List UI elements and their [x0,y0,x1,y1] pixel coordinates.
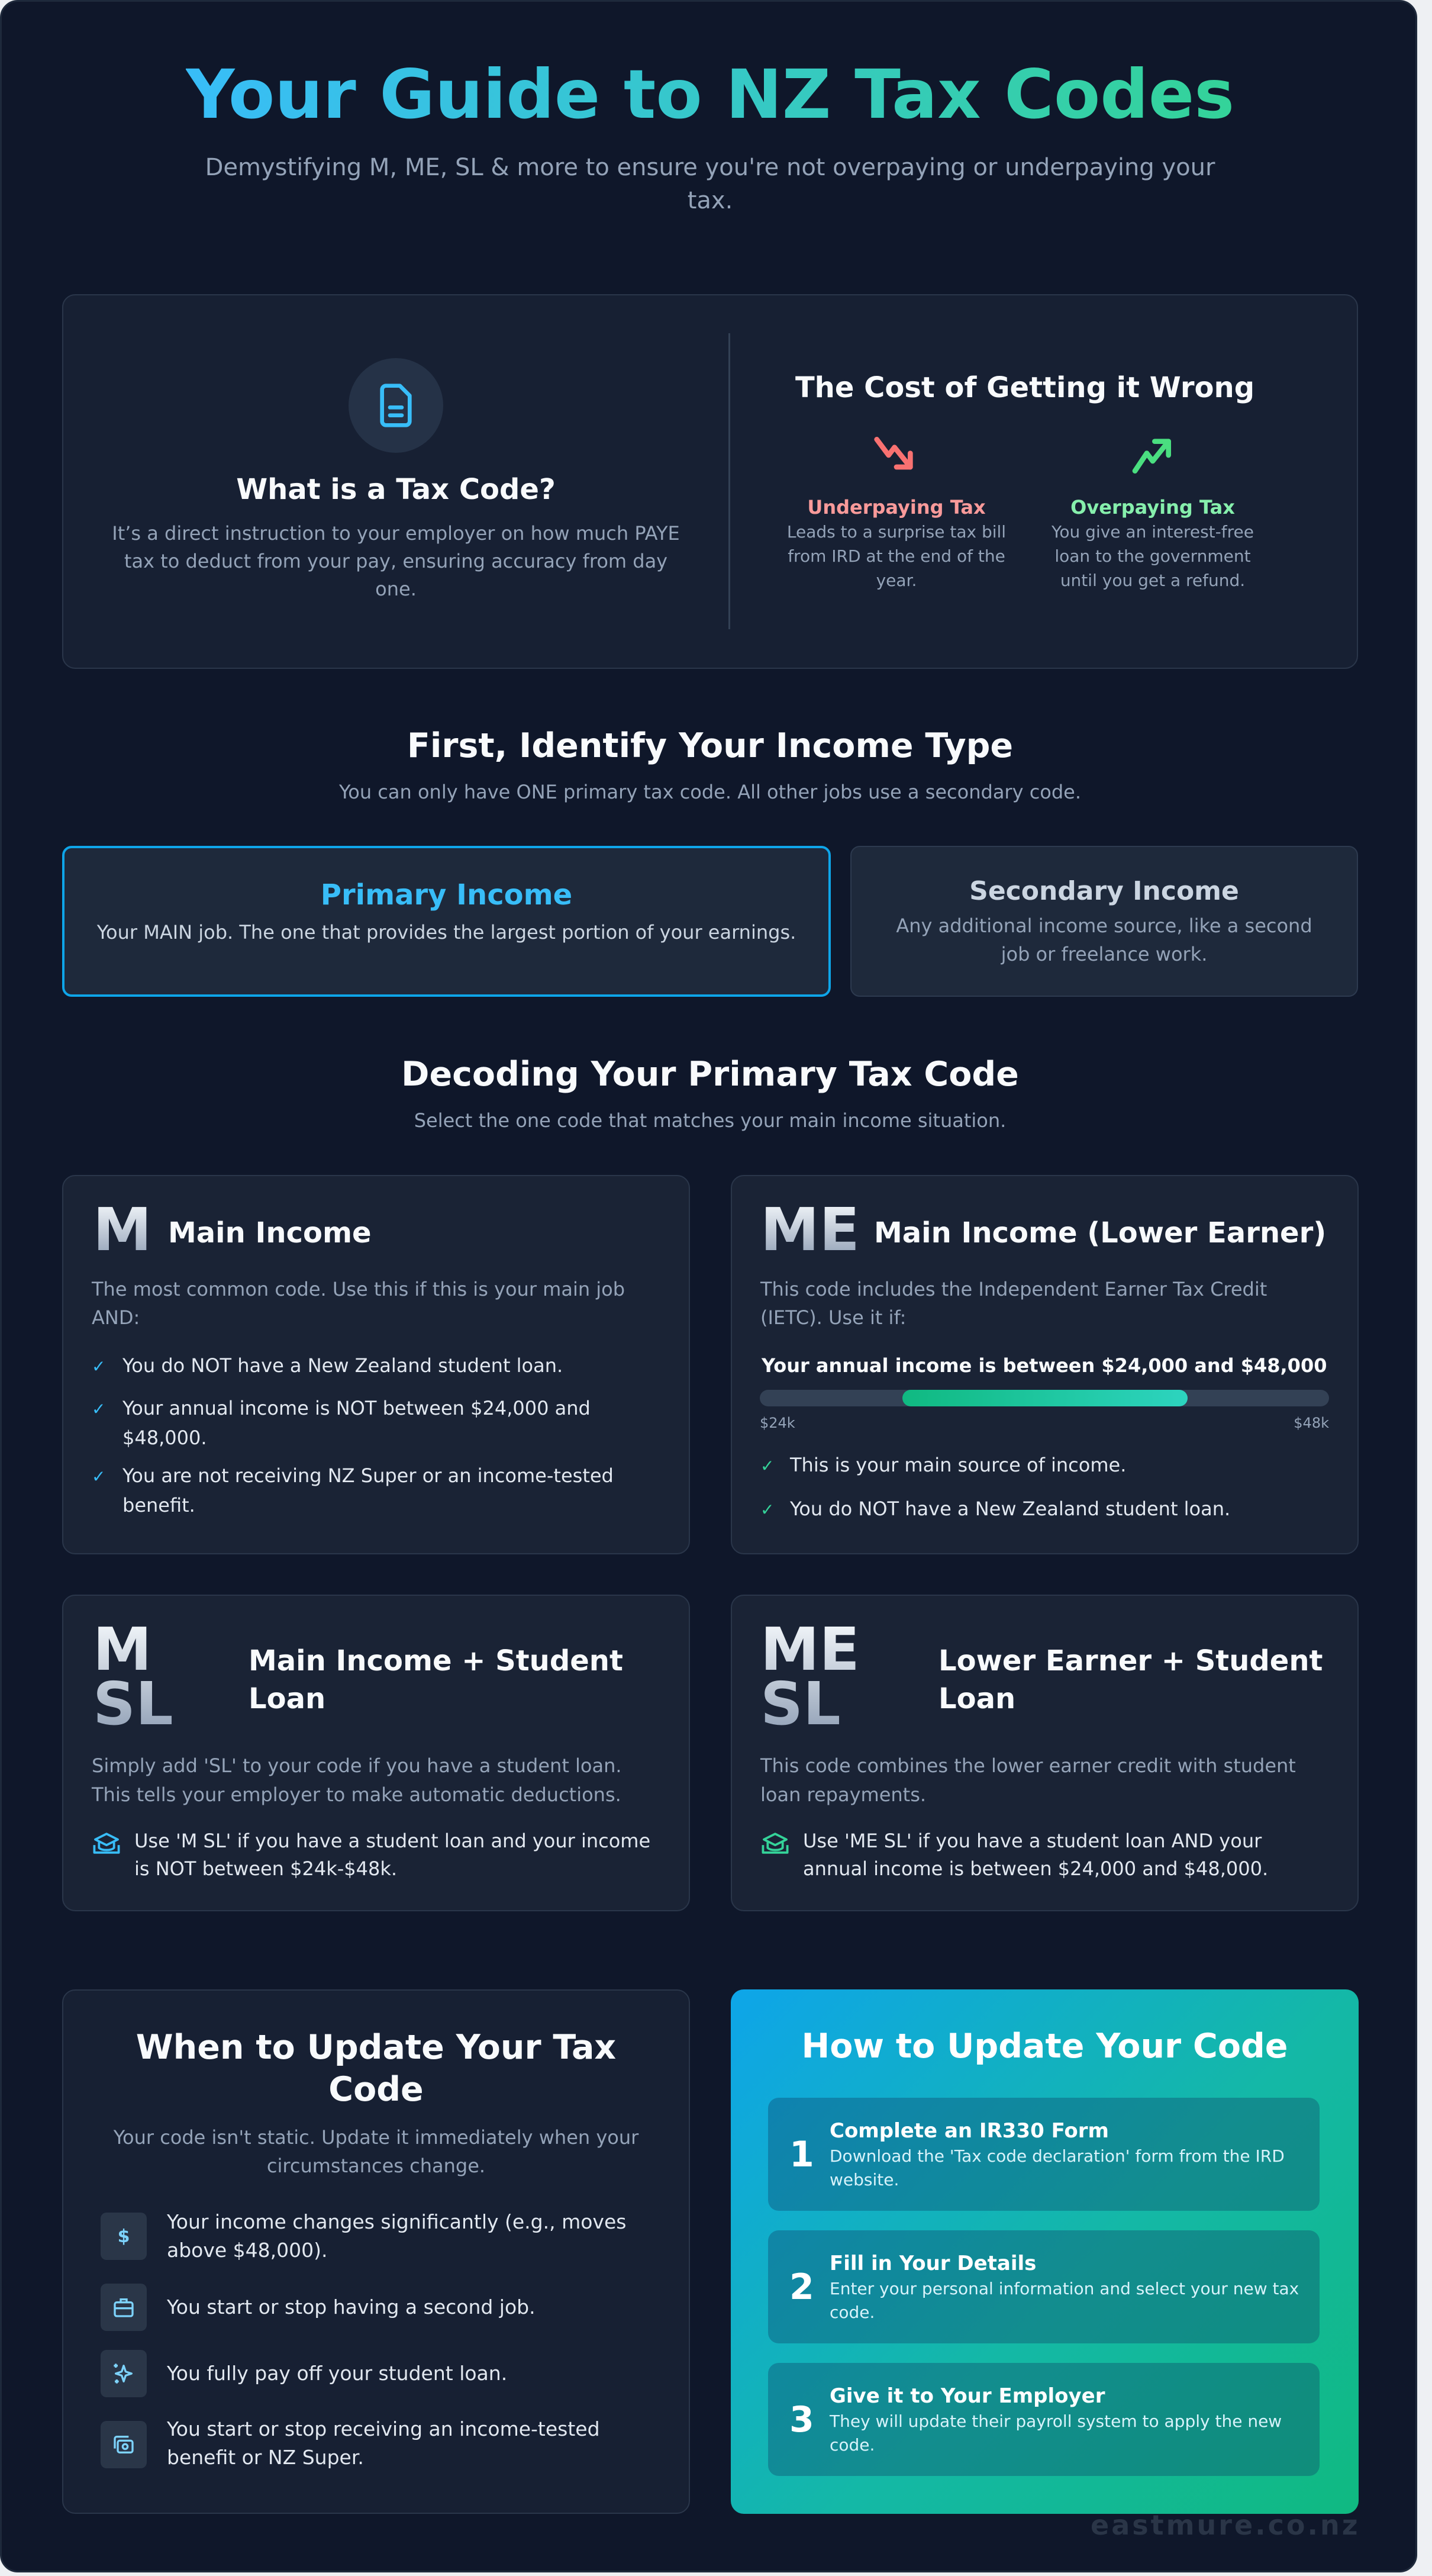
checklist: You do NOT have a New Zealand student loan. [790,1498,1230,1520]
panel: when to update [62,1989,690,2514]
heading: secondary: Secondary Income [969,876,1239,906]
checklist: You are not receiving NZ Super or an income-tested [122,1464,614,1487]
text: overpaying [1052,496,1254,590]
item: income change: above $48,000). [167,2239,328,2262]
step 3: 3 [789,2399,814,2440]
text: underpaying: from IRD at the end of the [788,546,1005,566]
note with icon [93,1830,650,1880]
step 2: Fill in Your Details [830,2252,1036,2275]
item: benefit: You start or stop receiving an income-tested [167,2417,600,2440]
text: overpaying: until you get a refund. [1060,571,1245,590]
code letters ME SL [760,1622,860,1731]
checklist: Your annual income is NOT between $24,000 and [122,1397,591,1419]
step 3: They will update their payroll system to apply the new [830,2411,1282,2431]
item: benefit [101,2417,600,2469]
code letters ME SL: ME [760,1615,860,1684]
note with icon [762,1830,1268,1880]
text: overpaying: Overpaying Tax [1070,496,1235,519]
subtext: Your code isn't static. Update it immediately when your [114,2126,638,2149]
icon: trending up [1133,439,1171,474]
icon: dollar: $ [118,2226,130,2247]
text: underpaying: Leads to a surprise tax bill [787,522,1006,542]
text: tax code description: It’s a direct instruction to your employer on how much PAYE [112,522,680,545]
subtitle: Demystifying M, ME, SL & more to ensure you're not overpaying or underpaying your [205,154,1215,181]
subtitle: tax. [688,187,733,214]
step 1: website. [830,2170,899,2189]
card: M SL [62,1595,690,1911]
title [249,1644,623,1715]
panel: secondary income [850,846,1358,997]
desc: This code includes the Independent Earner Tax Credit [760,1278,1267,1300]
title: Main Income + Student [249,1644,623,1677]
checklist: $48,000. [122,1427,207,1449]
note with icon: Use 'M SL' if you have a student loan and your income [134,1830,650,1852]
item: second job [101,2284,536,2331]
title [938,1644,1323,1715]
step 1: Complete an IR330 Form [830,2119,1109,2143]
bar labels: $48k [1294,1415,1329,1431]
desc: The most common code. Use this if this is your main job [92,1278,625,1300]
desc: Simply add 'SL' to your code if you have a student loan. [92,1754,622,1777]
checklist: You do NOT have a New Zealand student loan. [122,1354,563,1377]
title: Main Income (Lower Earner) [874,1216,1326,1250]
checklist: ✓ [92,1399,105,1419]
text: overpaying: You give an interest-free [1052,522,1254,542]
text: secondary desc: Any additional income source, like a second [896,915,1312,937]
step 3: Give it to Your Employer [830,2384,1105,2408]
step 1: Download the 'Tax code declaration' form from the IRD [830,2146,1285,2166]
bar labels [760,1415,1329,1431]
note with icon: is NOT between $24k-$48k. [134,1857,397,1880]
desc: This code combines the lower earner credit with student [760,1754,1296,1777]
heading: identify income type: First, Identify Your Income Type [407,726,1013,765]
icon: dollar [101,2213,147,2260]
step 1 [768,2098,1320,2211]
panel: how to update [731,1989,1359,2514]
icon: sparkle [101,2350,147,2397]
card: ME [731,1175,1359,1554]
step 2: 2 [789,2266,814,2308]
checklist: ✓ [92,1467,105,1486]
item: income change: Your income changes significantly (e.g., moves [167,2210,626,2233]
text: secondary desc [896,915,1312,965]
text: underpaying: year. [876,571,917,590]
range bar [760,1390,1329,1406]
code letter M: M [93,1195,152,1264]
code letters M SL: M [93,1615,152,1684]
note with icon: Use 'ME SL' if you have a student loan AND your [803,1830,1262,1852]
step 2 [768,2230,1320,2343]
checklist: ✓ [92,1357,105,1376]
text: tax code description: one. [375,578,417,600]
icon: cash [101,2421,147,2468]
heading [136,2028,616,2109]
item: income change [101,2210,626,2262]
icon: document [349,358,443,453]
subtext: circumstances change. [267,2155,485,2177]
title: Loan [249,1682,325,1715]
item: student loan paid [101,2350,507,2397]
icon: briefcase [101,2284,147,2331]
step 3: code. [830,2435,875,2455]
heading: primary: Primary Income [321,878,572,912]
code letters ME: ME [760,1195,860,1264]
subheading: Select the one code that matches your main income situation. [414,1109,1006,1132]
checklist: benefit. [122,1494,195,1516]
text: tax code description: tax to deduct from your pay, ensuring accuracy from day [124,550,667,572]
desc [760,1754,1296,1806]
subtext [114,2126,639,2177]
checklist: ✓ [760,1500,774,1519]
card: ME SL [731,1595,1359,1911]
heading: How to Update Your Code [802,2027,1288,2066]
text: underpaying [787,496,1006,590]
card: M [62,1175,690,1554]
heading: cost of getting it wrong: The Cost of Getting it Wrong [795,371,1254,404]
subheading: You can only have ONE primary tax code. All other jobs use a secondary code. [339,781,1081,803]
panel: intro [62,294,1358,669]
checklist [760,1454,1230,1520]
panel: primary income [62,846,831,997]
item: student loan paid: You fully pay off your student loan. [167,2362,507,2385]
code letters ME SL: SL [760,1669,841,1738]
desc: loan repayments. [760,1783,926,1806]
heading: Code [328,2070,424,2109]
desc [91,1754,622,1806]
step 2: Enter your personal information and select your new tax [830,2279,1299,2298]
step 3 [768,2363,1320,2476]
checklist [92,1354,614,1516]
title: Loan [938,1682,1015,1715]
bar labels: $24k [760,1415,795,1431]
checklist: This is your main source of income. [790,1454,1126,1476]
note with icon: annual income is between $24,000 and $48,000. [803,1857,1268,1880]
desc: AND: [92,1306,140,1329]
text: secondary desc: job or freelance work. [1001,943,1207,965]
code letters M SL: SL [93,1669,173,1738]
watermark: eastmure.co.nz [1091,2509,1360,2541]
text: overpaying: loan to the government [1054,546,1251,566]
subtitle [205,154,1215,214]
heading: decoding: Decoding Your Primary Tax Code [401,1055,1019,1094]
heading: When to Update Your Tax [136,2028,616,2067]
income range label: Your annual income is between $24,000 and $48,000 [762,1354,1327,1377]
desc: This tells your employer to make automatic deductions. [92,1783,621,1806]
title: Your Guide to NZ Tax Codes [186,55,1234,134]
step 2: code. [830,2303,875,2322]
text: underpaying: Underpaying Tax [807,496,986,519]
desc [91,1278,625,1329]
checklist: ✓ [760,1456,774,1476]
text: primary desc: Your MAIN job. The one that provides the largest portion of your earnings. [97,921,796,944]
code letters M SL [93,1622,173,1731]
heading: what is a tax code: What is a Tax Code? [236,473,556,506]
icon: trending down [874,437,913,470]
title: Main Income [168,1216,372,1250]
item: second job: You start or stop having a second job. [167,2295,536,2319]
item: benefit: benefit or NZ Super. [167,2446,364,2469]
desc: (IETC). Use it if: [760,1306,906,1329]
desc [760,1278,1267,1329]
title: Lower Earner + Student [938,1644,1323,1677]
text: tax code description [112,522,680,600]
step 1: 1 [789,2134,814,2175]
